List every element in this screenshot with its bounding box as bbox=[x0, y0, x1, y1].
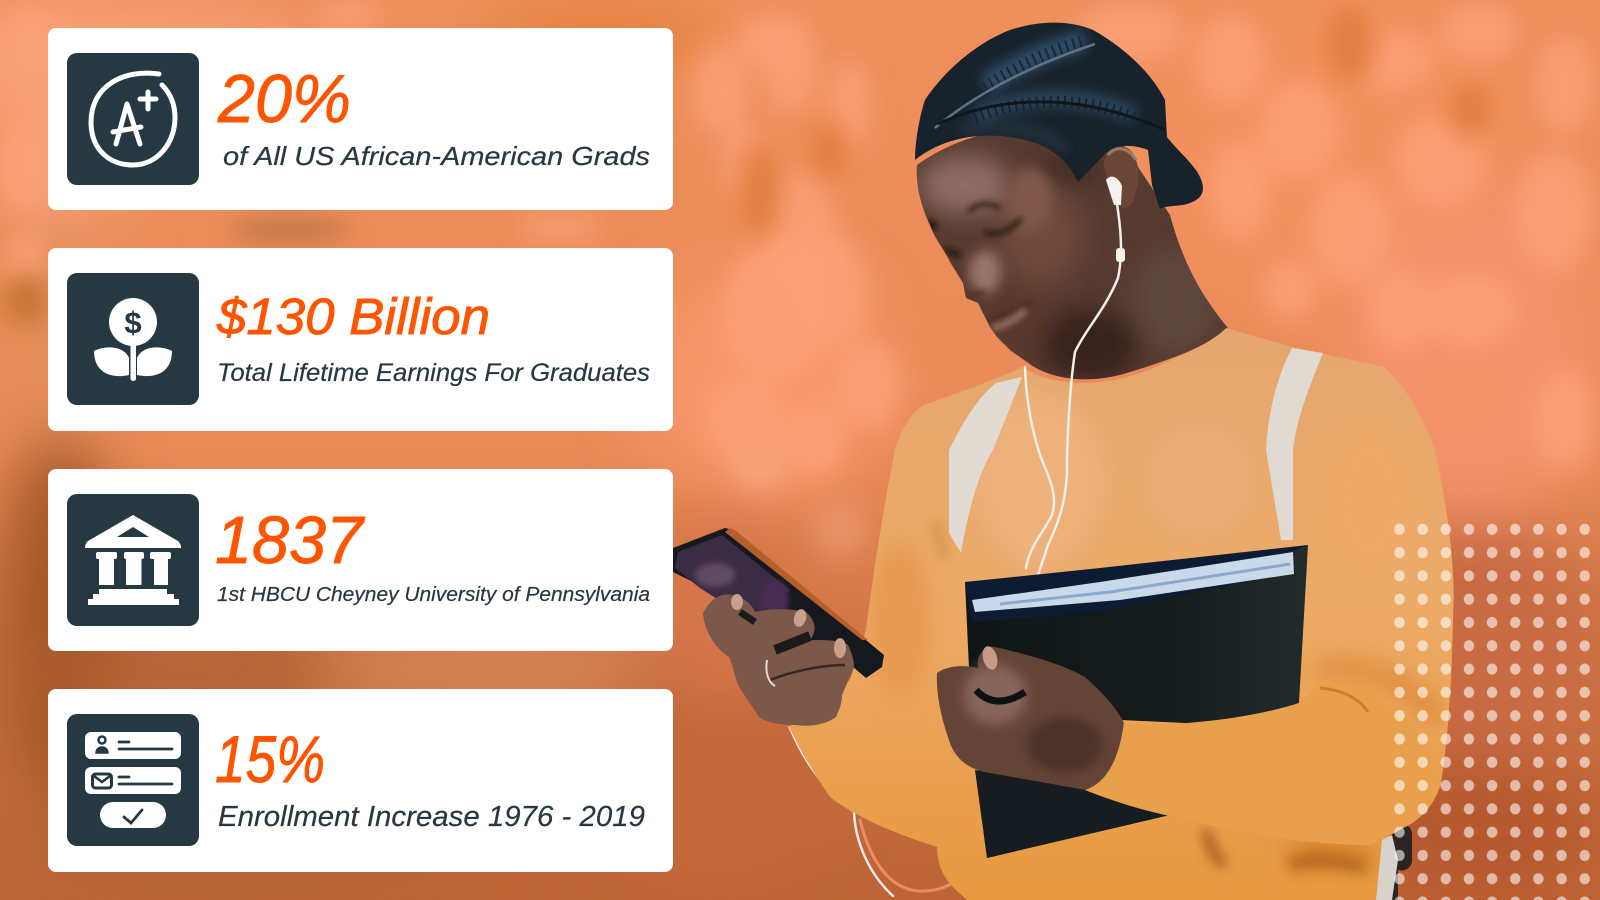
value: $130 Billion: $130 Billion bbox=[216, 288, 490, 345]
label: Enrollment Increase 1976 - 2019: Enrollment Increase 1976 - 2019 bbox=[218, 801, 645, 833]
value: 20%: 20% bbox=[217, 61, 351, 137]
sleeve over folder bbox=[1085, 682, 1441, 845]
photo: student with phone and folder bbox=[673, 23, 1454, 900]
phone bbox=[673, 528, 884, 678]
folder bbox=[965, 545, 1308, 858]
value: 15%: 15% bbox=[215, 722, 325, 796]
backpack strap bottom bbox=[1370, 826, 1412, 900]
earphone wires bbox=[1025, 185, 1121, 575]
icon: form with checkmark bbox=[67, 714, 199, 846]
icon: A+ grade bbox=[67, 53, 199, 185]
neck and face bbox=[917, 127, 1228, 379]
label: Total Lifetime Earnings For Graduates: Total Lifetime Earnings For Graduates bbox=[217, 359, 650, 387]
panel: first HBCU stat bbox=[48, 469, 673, 651]
label: of All US African-American Grads: of All US African-American Grads bbox=[223, 141, 650, 171]
halftone dot pattern bbox=[1388, 518, 1600, 900]
ear bbox=[1104, 146, 1138, 208]
hand holding phone bbox=[703, 594, 854, 726]
eye and brow bbox=[928, 204, 1030, 328]
earbud bbox=[1106, 177, 1125, 262]
label: 1st HBCU Cheyney University of Pennsylvania: 1st HBCU Cheyney University of Pennsylvania bbox=[217, 584, 650, 606]
icon: money plant: $ bbox=[124, 305, 142, 340]
panel: enrollment stat bbox=[48, 689, 673, 872]
value: 1837: 1837 bbox=[215, 503, 366, 578]
wires below sleeve bbox=[789, 680, 955, 896]
panel: graduates stat bbox=[48, 28, 673, 210]
backpack straps bbox=[1266, 348, 1323, 540]
panel: lifetime earnings stat bbox=[48, 248, 673, 431]
icon: university building bbox=[67, 494, 199, 626]
icon: money plant bbox=[67, 273, 199, 405]
hand holding folder bbox=[937, 645, 1124, 792]
sweater body bbox=[789, 328, 1454, 900]
hair bbox=[915, 23, 1203, 209]
